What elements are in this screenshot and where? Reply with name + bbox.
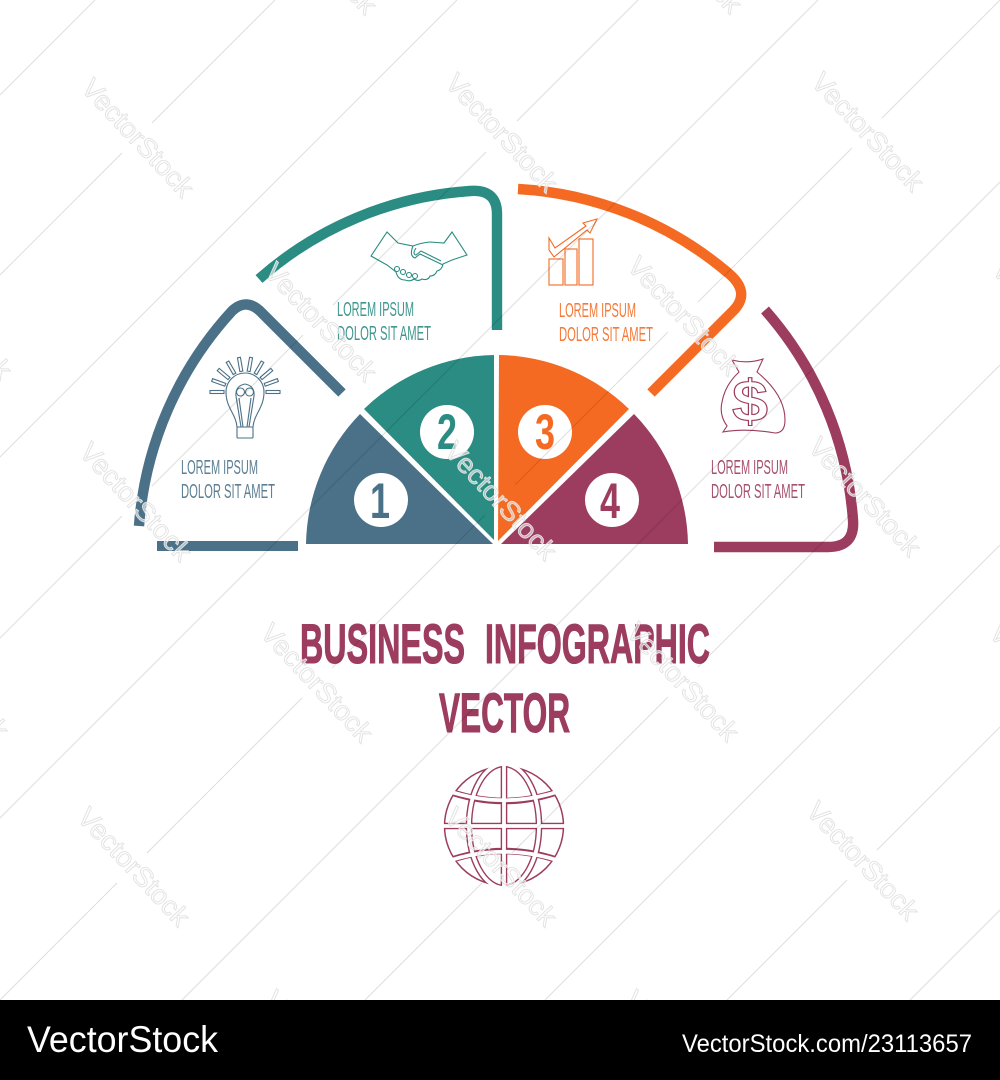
segment 2 outline and content xyxy=(259,191,497,345)
footer bar xyxy=(0,1000,1000,1080)
badge 1 xyxy=(354,473,408,529)
badge 3 xyxy=(518,404,572,460)
outline arc 1 xyxy=(139,304,342,526)
text block 4: DOLOR SIT AMET xyxy=(711,481,805,503)
badge 1: 1 xyxy=(370,473,390,529)
wedge 1 xyxy=(306,414,493,544)
title: BUSINESS xyxy=(300,612,465,675)
text block 4: LOREM IPSUM xyxy=(711,457,788,479)
text block 2: LOREM IPSUM xyxy=(337,299,414,321)
outline arc 2 xyxy=(259,191,497,330)
outline arc 3 xyxy=(518,189,741,393)
title: VECTOR xyxy=(439,681,570,744)
segment 4 outline and content xyxy=(711,310,853,547)
watermark pattern: VectorStock xyxy=(438,436,563,566)
text block 3 xyxy=(559,300,653,346)
text block 1: DOLOR SIT AMET xyxy=(181,481,275,503)
badge 3: 3 xyxy=(535,404,555,460)
watermark pattern: VectorStock xyxy=(258,257,383,387)
watermark pattern: VectorStock xyxy=(438,802,563,932)
watermark pattern: VectorStock xyxy=(73,437,198,567)
semicircle chart xyxy=(306,355,688,544)
badge 2 xyxy=(420,404,474,460)
footer brand: VectorStock xyxy=(27,1019,218,1060)
footer image id: VectorStock.com/23113657 xyxy=(682,1030,972,1058)
watermark pattern: VectorStock xyxy=(254,618,379,748)
text block 2: DOLOR SIT AMET xyxy=(337,323,431,345)
outline arc 4 xyxy=(714,310,853,547)
text block 3: LOREM IPSUM xyxy=(559,300,636,322)
watermark pattern: VectorStock xyxy=(802,432,927,562)
title: INFOGRAPHIC xyxy=(485,612,710,675)
wedge 4 xyxy=(501,414,688,544)
watermark pattern: VectorStock xyxy=(439,68,564,198)
text block 4 xyxy=(711,457,805,503)
badge 4: 4 xyxy=(600,473,620,529)
watermark pattern: VectorStock xyxy=(75,73,200,203)
text block 1: LOREM IPSUM xyxy=(181,457,258,479)
badge 2: 2 xyxy=(437,404,457,460)
title xyxy=(300,612,710,744)
watermark pattern: VectorStock xyxy=(621,251,746,381)
watermark pattern: VectorStock xyxy=(800,796,925,926)
segment 3 outline and content xyxy=(518,189,741,393)
wedge 3 xyxy=(498,355,629,541)
segment 1 outline and content xyxy=(139,304,342,551)
wedge 2 xyxy=(364,355,494,540)
icon: rising bar chart xyxy=(549,219,597,285)
icon: handshake xyxy=(371,232,467,281)
text block 3: DOLOR SIT AMET xyxy=(559,324,653,346)
badge 4 xyxy=(585,473,639,529)
text block 1 xyxy=(181,457,275,503)
text block 2 xyxy=(337,299,431,345)
watermark pattern: VectorStock xyxy=(71,802,196,932)
watermark pattern: VectorStock xyxy=(805,67,930,197)
icon: money bag xyxy=(721,359,785,434)
icon: light bulb xyxy=(210,357,280,438)
icon: money bag: $ xyxy=(732,369,768,434)
outline base 1 xyxy=(157,541,298,551)
icon: globe xyxy=(444,766,564,886)
watermark pattern: VectorStock xyxy=(620,617,745,747)
